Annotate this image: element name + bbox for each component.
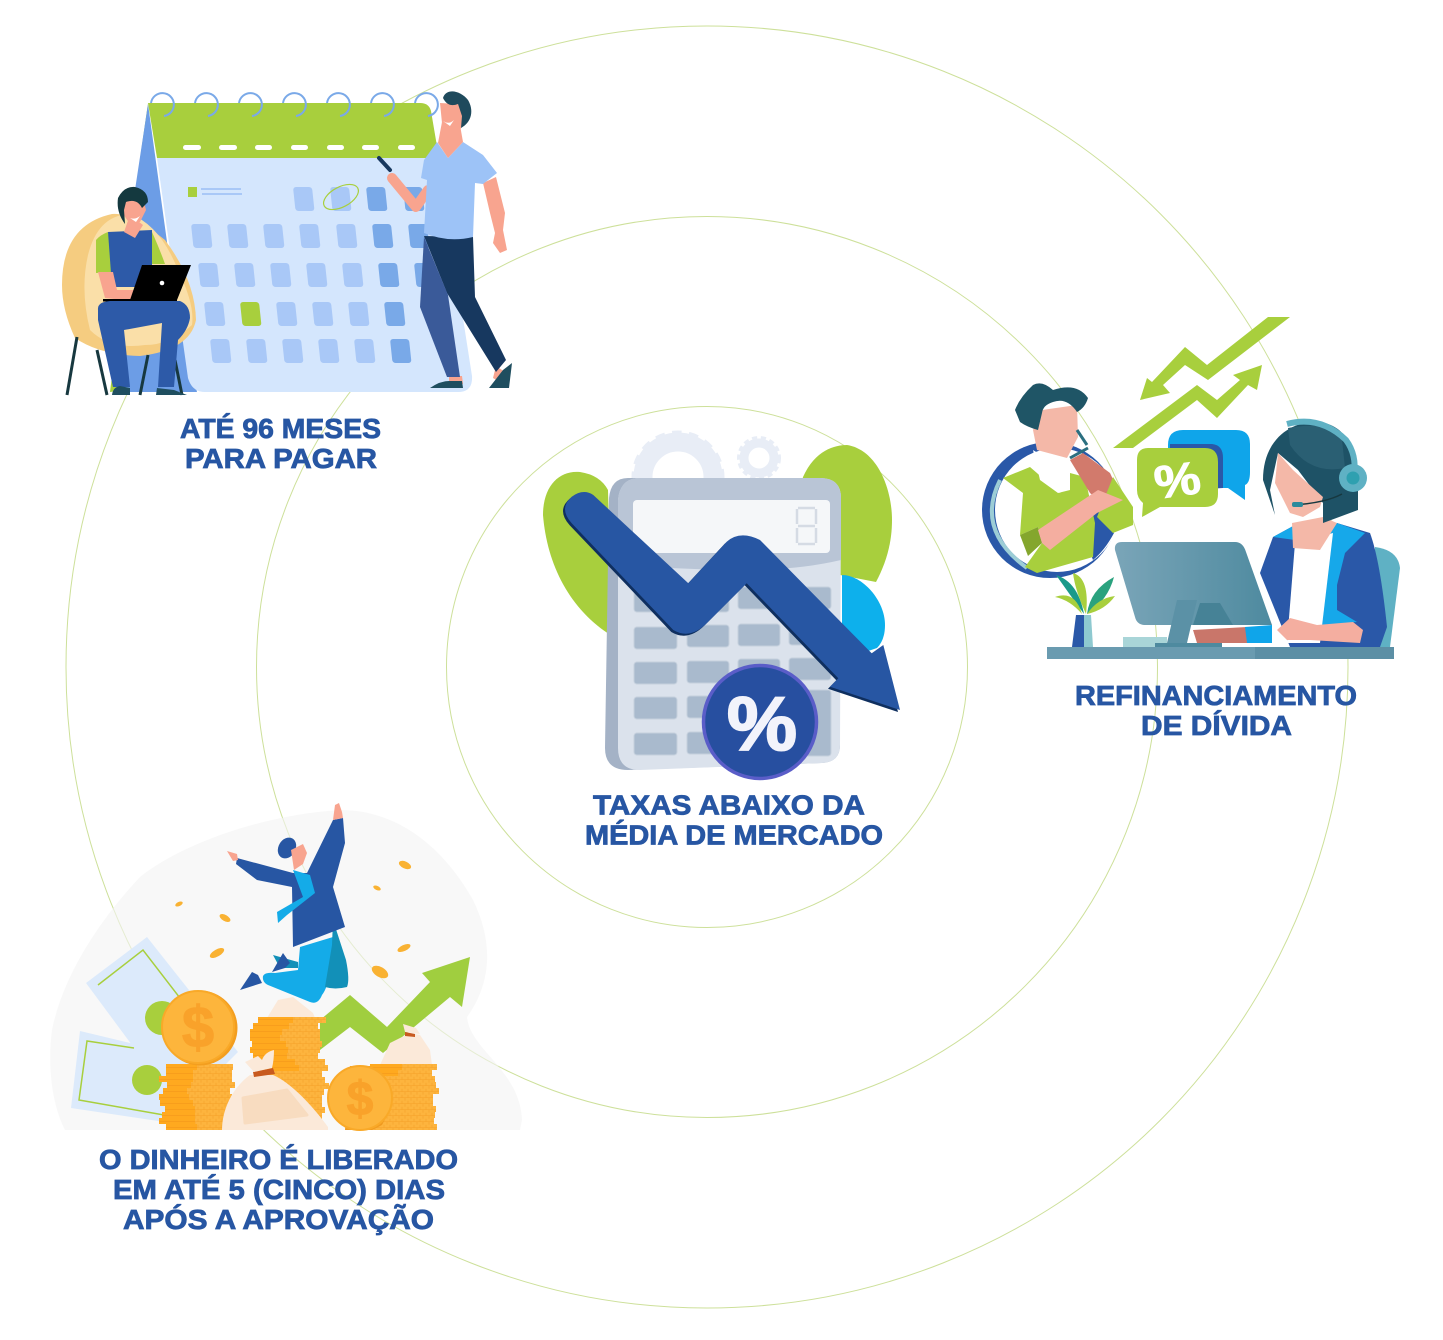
heading: o dinheiro é liberado: APÓS A APROVAÇÃO <box>123 1204 434 1235</box>
background blob <box>50 810 522 1130</box>
icon: calculator <box>605 478 841 770</box>
arrow: falling rates <box>563 492 900 712</box>
icon: chat bubbles: % <box>1151 451 1204 509</box>
icon: chat bubbles <box>1137 430 1250 517</box>
icon: plant <box>1055 573 1115 647</box>
figure: seated man with laptop <box>62 187 196 395</box>
icon: falling coins <box>175 859 412 981</box>
heading: até 96 meses: ATÉ 96 MESES <box>180 413 381 444</box>
badge: percent <box>704 666 816 778</box>
heading: o dinheiro é liberado <box>99 1144 458 1235</box>
icon: coin stacks <box>159 1017 439 1130</box>
heading: refinanciamento <box>1075 680 1357 741</box>
heading: taxas abaixo da média <box>585 790 883 850</box>
figure: call-center agent <box>1193 422 1400 647</box>
icon: banknotes <box>71 937 238 1122</box>
heading: até 96 meses <box>180 413 381 474</box>
icon: calendar <box>110 93 472 392</box>
icon: leaves <box>543 445 892 660</box>
heading: refinanciamento: DE DÍVIDA <box>1141 710 1292 741</box>
panel: installments <box>62 91 512 474</box>
panel: rates <box>543 435 900 850</box>
heading: o dinheiro é liberado: O DINHEIRO É LIBERADO <box>99 1144 458 1175</box>
panel: release of money <box>50 803 522 1235</box>
icon: trend arrows <box>1113 317 1290 448</box>
figure: standing man <box>379 91 512 388</box>
icon: gears <box>636 435 778 519</box>
panel: refinancing <box>982 317 1400 741</box>
heading: refinanciamento: REFINANCIAMENTO <box>1075 680 1357 711</box>
heading: o dinheiro é liberado: EM ATÉ 5 (CINCO) DIAS <box>113 1174 445 1205</box>
icon: dollar coins: $ <box>347 1073 374 1126</box>
icon: small money bags <box>267 997 432 1065</box>
heading: taxas abaixo da média: TAXAS ABAIXO DA <box>593 790 865 820</box>
figure: man on phone <box>982 383 1133 578</box>
heading: taxas abaixo da média: MÉDIA DE MERCADO <box>585 820 883 850</box>
arrow: rising money <box>320 957 470 1053</box>
badge: percent: % <box>727 682 797 767</box>
icon: dollar coins: $ <box>182 995 214 1060</box>
figure: jumping man <box>227 803 348 1003</box>
icon: dollar coins <box>162 990 392 1130</box>
icon: monitor and desk <box>1047 542 1394 659</box>
icon: money bag <box>222 1050 328 1130</box>
heading: até 96 meses: PARA PAGAR <box>185 443 377 474</box>
